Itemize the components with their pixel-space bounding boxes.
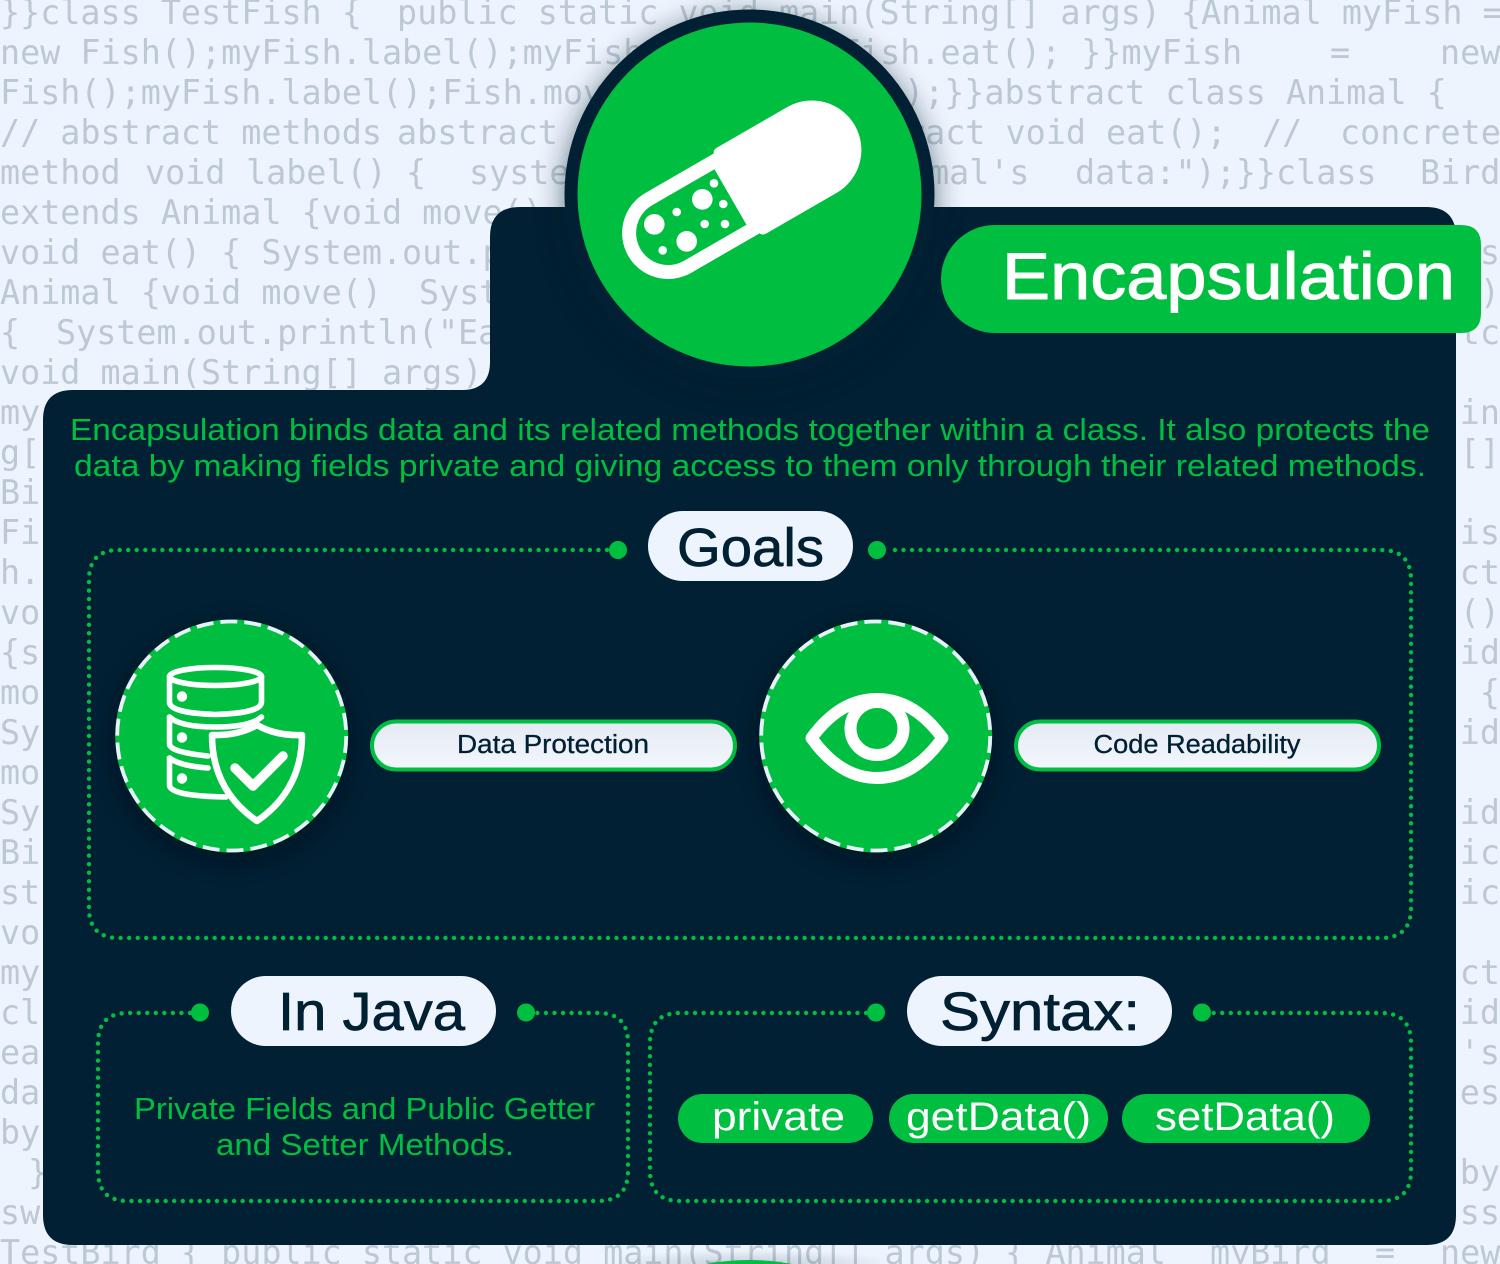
background code text: ss: [1460, 1193, 1500, 1232]
background code text: id: [1460, 713, 1500, 752]
background code text: mo: [0, 753, 40, 792]
panel: in java: [98, 976, 628, 1201]
background code text: (): [1460, 593, 1500, 632]
background code text: id: [1460, 993, 1500, 1032]
label: code readability: [1016, 722, 1379, 770]
capsule badge: [563, 10, 935, 387]
background code text: id: [1460, 633, 1500, 672]
background code text: Sy: [0, 793, 40, 832]
background code text: Fish.eat(); }}myFish: [840, 33, 1242, 72]
title: Encapsulation: [1002, 239, 1455, 313]
background code text: ct: [1460, 553, 1500, 592]
code tag: getData: getData(): [906, 1095, 1091, 1139]
background code text: new: [1440, 33, 1500, 72]
background code text: =: [1330, 33, 1350, 72]
background code text: method: [0, 153, 121, 192]
icon: capsule: [604, 82, 879, 299]
background code text: es: [1460, 1073, 1500, 1112]
background code text: by: [1460, 1153, 1500, 1192]
background code text: g[: [0, 433, 40, 472]
background code text: {: [1480, 673, 1500, 712]
background code text: concrete: [1340, 113, 1500, 152]
background code text: id: [1460, 793, 1500, 832]
background code text: Animal {void move(): [0, 273, 382, 312]
background code text: void main(String[] args) {: [0, 353, 523, 392]
background code text: }: [28, 1153, 48, 1192]
background code text: in: [1460, 393, 1500, 432]
background code text: ): [1480, 273, 1500, 312]
background code text: da: [0, 1073, 40, 1112]
panel: goals: [89, 511, 1411, 938]
background code text: []: [1460, 433, 1500, 472]
background code text: ea: [0, 1033, 40, 1072]
icon: eye: [759, 620, 992, 860]
code tag: setData: setData(): [1155, 1095, 1335, 1139]
background code text: my: [0, 393, 40, 432]
background code text: {: [0, 313, 20, 352]
heading: goals: Goals: [677, 518, 824, 578]
background code text: System.out.println("Eat: [56, 313, 518, 352]
background code text: system: [469, 153, 590, 192]
background code text: my: [0, 953, 40, 992]
icon: database with shield: [115, 620, 348, 860]
background code text: Fi: [0, 513, 40, 552]
background code text: label(): [246, 153, 387, 192]
background code text: );}}abstract class Animal {: [904, 73, 1447, 112]
main panel: [43, 207, 1456, 1245]
background code text: extends Animal {void move(): [0, 193, 563, 232]
background code text: st: [0, 873, 40, 912]
background code text: //: [1262, 113, 1302, 152]
background code text: {s: [0, 633, 40, 672]
label: code readability: Code Readability: [1094, 731, 1301, 759]
background code text: is: [1460, 513, 1500, 552]
background code text: cl: [0, 993, 40, 1032]
heading: syntax: [907, 976, 1172, 1046]
background code text: Fish();myFish.label();Fish.move();Fish.eat();: [0, 73, 905, 112]
background code text: mal's: [929, 153, 1030, 192]
text: private fields: Private Fields and Public Getter: [134, 1091, 595, 1126]
intro text: [70, 412, 1430, 483]
title banner: [941, 225, 1481, 333]
background code text: ct: [1460, 953, 1500, 992]
code tag: getData: [889, 1094, 1108, 1143]
intro text: Encapsulation binds data and its related methods together within a class. It also protects the: [70, 412, 1430, 447]
background code text: ic: [1460, 873, 1500, 912]
background code text: Bird: [1420, 153, 1500, 192]
code tag: setData: [1122, 1094, 1370, 1143]
background code text: Bi: [0, 473, 40, 512]
background code text: new Fish();myFish.label();myFish.label();: [0, 33, 824, 72]
panel: syntax: [650, 976, 1411, 1201]
background code text: Sy: [0, 713, 40, 752]
background code text: abstract: [397, 113, 558, 152]
background code text: vo: [0, 913, 40, 952]
background code text: data:");}}class: [1075, 153, 1377, 192]
next section circle sliver: [620, 1240, 880, 1264]
background code text: void eat() { System.out.pr: [0, 233, 523, 272]
background code text: Bi: [0, 833, 40, 872]
label: data protection: Data Protection: [457, 731, 649, 759]
background code text: {: [406, 153, 426, 192]
background code text: by: [0, 1113, 40, 1152]
text: private fields: [134, 1091, 595, 1162]
heading: goals: [648, 511, 853, 581]
text: private fields: and Setter Methods.: [216, 1127, 514, 1162]
code tag: private: private: [712, 1095, 845, 1139]
background code text: s: [1480, 233, 1500, 272]
heading: in java: In Java: [278, 982, 466, 1042]
intro text: data by making fields private and giving access to them only through their related methods.: [74, 448, 1426, 483]
background code text: sw: [0, 1193, 41, 1232]
heading: in java: [231, 976, 496, 1046]
code tag: private: [678, 1094, 873, 1143]
background code text: 's: [1460, 1033, 1500, 1072]
background code text: tc: [1460, 313, 1500, 352]
background code text: h.: [0, 553, 40, 592]
background code text: System: [419, 273, 540, 312]
heading: syntax: Syntax:: [940, 982, 1140, 1042]
background code text: ic: [1460, 833, 1500, 872]
background code text: mo: [0, 673, 40, 712]
background code text: ract void eat();: [905, 113, 1227, 152]
label: data protection: [372, 722, 735, 770]
background code text: // abstract methods: [0, 113, 382, 152]
background code text: void: [145, 153, 225, 192]
background code text: vo: [0, 593, 40, 632]
